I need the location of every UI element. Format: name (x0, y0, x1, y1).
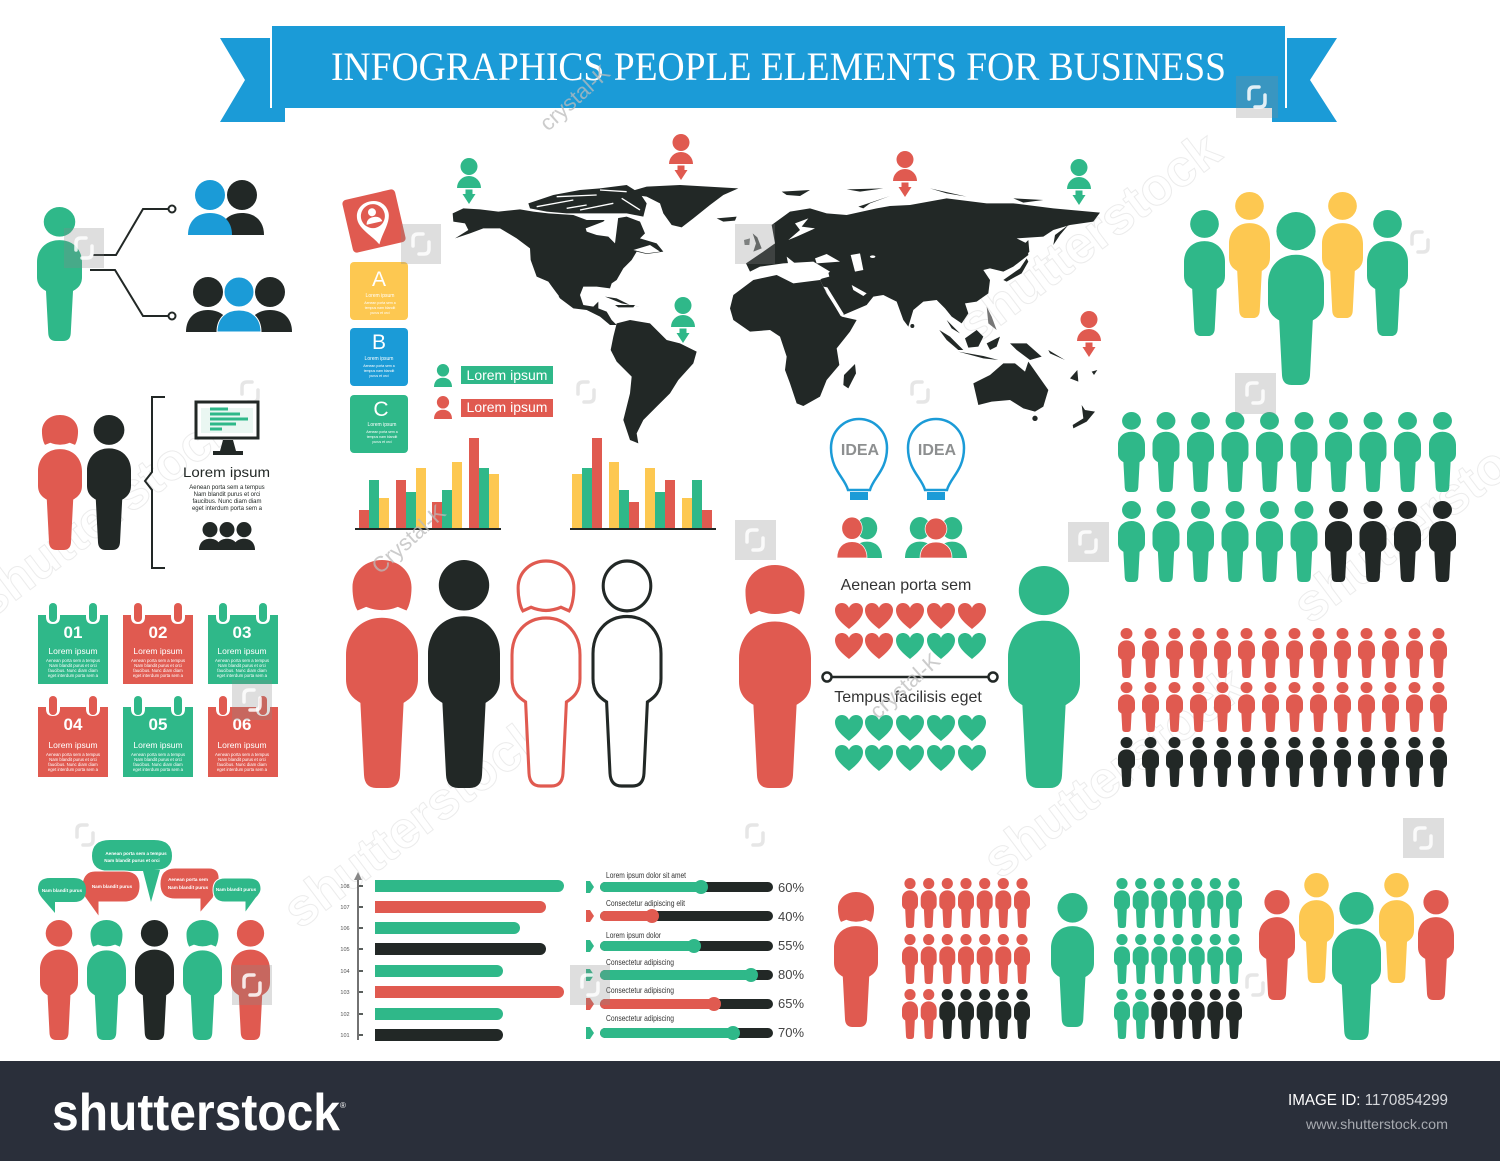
horizontal bar chart: 103 (340, 990, 350, 996)
site url: www.shutterstock.com (1305, 1116, 1448, 1132)
image id: IMAGE ID: 1170854299 (1288, 1092, 1448, 1109)
calendar 06: eget interdum porta sem a (217, 767, 268, 772)
calendar 04 (38, 696, 108, 777)
calendar 02: Nam blandit purus et orci (134, 663, 182, 668)
card C: tempus nam blandit (367, 435, 397, 439)
pin: green South America (671, 297, 695, 343)
slider 70%: 70% (778, 1025, 804, 1040)
calendar 02: 02 (149, 623, 167, 642)
horizontal bar chart: 108 (340, 884, 350, 890)
icon: three people (905, 517, 967, 558)
progress sliders (586, 871, 804, 1040)
icon: monitor with chart (196, 402, 258, 455)
slider 80%: 80% (778, 967, 804, 982)
logo: shutterstock (52, 1084, 340, 1142)
card B: tempus nam blandit (364, 369, 394, 373)
slider 80%: Consectetur adipiscing (606, 958, 674, 967)
calendar 01: Nam blandit purus et orci (49, 663, 97, 668)
calendar 06 (208, 696, 278, 777)
panel: bottom right group (1259, 873, 1454, 1040)
calendar 02: Lorem ipsum (133, 646, 183, 656)
panel: bottom green figure and grid (1051, 878, 1242, 1039)
panel: green people group with yellow (1184, 192, 1408, 385)
calendar 01: Lorem ipsum (48, 646, 98, 656)
card A: Aenean porta sem a (364, 301, 396, 305)
calendar 05: Nam blandit purus et orci (134, 757, 182, 762)
slider 55%: Lorem ipsum dolor (606, 931, 661, 940)
watermark: diagonal text: shutterstock (972, 655, 1257, 890)
calendar 03: Aenean porta sem a tempus (215, 658, 269, 663)
card C: purus et orci (372, 440, 392, 444)
calendar 03: Lorem ipsum (217, 646, 267, 656)
footer bar (0, 1061, 1500, 1161)
card B: purus et orci (369, 374, 389, 378)
calendar 04: eget interdum porta sem a (48, 767, 99, 772)
calendar 02 (123, 603, 193, 684)
calendar 06: faucibus. Nunc diam diam (217, 762, 267, 767)
card A: purus et orci (370, 311, 390, 315)
icon: three black people (199, 522, 255, 550)
bar chart: right (570, 438, 716, 530)
bubble: left red: Nam blandit purus (92, 884, 133, 889)
card B: B (372, 331, 386, 354)
calendar 03: faucibus. Nunc diam diam (217, 668, 267, 673)
panel: red figure, hearts, green figure: Tempus facilisis eget (834, 689, 982, 706)
calendar 04: 04 (64, 715, 83, 734)
slider 55% (586, 931, 804, 953)
panel: red and black pair with bracket: Aenean porta sem a tempus (189, 485, 265, 491)
bubble: left red (82, 871, 140, 917)
map pins (457, 134, 1101, 357)
pin: green Siberia (1067, 159, 1091, 205)
watermark: crystal-k text: Crystal-K (367, 499, 451, 579)
watermark: crystal-k text (367, 60, 945, 724)
map legend: Lorem ipsum (467, 367, 547, 383)
icon: idea bulb left: IDEA (841, 442, 880, 459)
calendar 06: Nam blandit purus et orci (218, 757, 266, 762)
icon: idea bulb right: IDEA (918, 442, 957, 459)
watermark: crystal-k text: crystal-K (865, 648, 945, 724)
slider 60% (586, 871, 804, 895)
slider 40%: Consectetur adipiscing elit (606, 899, 686, 908)
horizontal bar chart: 101 (340, 1033, 350, 1039)
calendar 03: 03 (233, 623, 251, 642)
horizontal bar chart: 104 (340, 969, 350, 975)
panel: pin and A B C cards (342, 189, 408, 453)
world map (453, 185, 1100, 443)
card C: Lorem ipsum (368, 422, 396, 428)
pin: green North America (457, 158, 481, 204)
card B (350, 328, 408, 386)
panel: bottom red figure and grid (834, 878, 1030, 1039)
calendar 02: faucibus. Nunc diam diam (133, 668, 183, 673)
watermark: diagonal text: shutterstock (947, 120, 1232, 355)
horizontal bar chart: 106 (340, 926, 350, 932)
slider 70% (586, 1014, 804, 1040)
card B: Lorem ipsum (365, 356, 393, 362)
card B: Aenean porta sem a (363, 364, 395, 368)
horizontal bar chart: 102 (340, 1012, 350, 1018)
icon: two people (837, 517, 882, 558)
bubble: far left green (38, 878, 86, 913)
panel: four large figures (346, 560, 661, 788)
card A (350, 262, 408, 320)
calendar 06: Aenean porta sem a tempus (215, 752, 269, 757)
footer bar: ® (340, 1101, 346, 1110)
map legend (434, 364, 553, 419)
bubble: right red (160, 868, 219, 913)
card C: Aenean porta sem a (366, 430, 398, 434)
card C: C (373, 398, 389, 421)
panel: red and black pair with bracket: faucibus. Nunc diam diam (192, 499, 262, 505)
title banner (220, 26, 1337, 122)
panel: calendars (38, 603, 278, 777)
watermark: faint swirl marks (77, 232, 1428, 995)
panel: red and black pair with bracket (38, 397, 270, 568)
calendar 04: Nam blandit purus et orci (49, 757, 97, 762)
panel: red and black pair with bracket: eget interdum porta sem a (192, 506, 263, 512)
panel: person to groups diagram (37, 180, 292, 341)
panel: red figure, hearts, green figure: Aenean porta sem (841, 577, 971, 594)
bubble: far right green: Nam blandit purus (216, 887, 257, 892)
icon: location pin badge (342, 189, 406, 253)
slider 40% (586, 899, 804, 924)
watermark: crystal-k text: crystal-K (535, 60, 615, 136)
panel: red figure, hearts, green figure (739, 565, 1080, 788)
panel: people talking with speech bubbles (38, 840, 270, 1040)
calendar 01: 01 (64, 623, 82, 642)
calendar 06: 06 (233, 715, 251, 734)
calendar 05: eget interdum porta sem a (133, 767, 184, 772)
eurasia africa oceania (730, 188, 1100, 428)
card A: Lorem ipsum (366, 293, 394, 299)
bubble: far right green (213, 878, 261, 913)
bubble: right red: Aenean porta sem (168, 877, 208, 882)
slider 40%: 40% (778, 909, 804, 924)
slider 65%: Consectetur adipiscing (606, 986, 674, 995)
watermark: diagonal text: shutterstock (272, 705, 557, 940)
calendar 02: Aenean porta sem a tempus (131, 658, 185, 663)
calendar 01: faucibus. Nunc diam diam (48, 668, 98, 673)
calendar 04: Lorem ipsum (48, 740, 98, 750)
americas (453, 185, 738, 443)
calendar 03 (208, 603, 278, 684)
title: INFOGRAPHICS PEOPLE ELEMENTS FOR BUSINESS (331, 44, 1226, 89)
calendar 02: eget interdum porta sem a (133, 673, 184, 678)
calendar 05: Lorem ipsum (133, 740, 183, 750)
slider 60%: 60% (778, 880, 804, 895)
map legend: Lorem ipsum (467, 399, 547, 415)
slider 65%: 65% (778, 996, 804, 1011)
card A: A (372, 268, 386, 291)
calendar 05: faucibus. Nunc diam diam (133, 762, 183, 767)
panel: red and black pair with bracket: Nam blandit purus et orci (194, 492, 260, 498)
calendar 03: eget interdum porta sem a (217, 673, 268, 678)
calendar 05: Aenean porta sem a tempus (131, 752, 185, 757)
panel: people grid red and black (1118, 628, 1447, 787)
pin: red Russia (893, 151, 917, 197)
slider 80% (586, 958, 804, 982)
slider 70%: Consectetur adipiscing (606, 1014, 674, 1023)
bubble: right red: Nam blandit purus (168, 885, 209, 890)
calendar 04: Aenean porta sem a tempus (46, 752, 100, 757)
calendar 05: 05 (149, 715, 167, 734)
calendar 01 (38, 603, 108, 684)
calendar 05 (123, 696, 193, 777)
card C (350, 395, 408, 453)
card A: tempus nam blandit (365, 306, 395, 310)
hearts rating top (835, 603, 986, 659)
hearts rating bottom (835, 715, 986, 771)
watermark: stamps (64, 76, 1444, 1005)
calendar 01: Aenean porta sem a tempus (46, 658, 100, 663)
calendar 06: Lorem ipsum (217, 740, 267, 750)
pin: red Greenland (669, 134, 693, 180)
calendar 03: Nam blandit purus et orci (218, 663, 266, 668)
calendar 04: faucibus. Nunc diam diam (48, 762, 98, 767)
slider 55%: 55% (778, 938, 804, 953)
bubble: top green: Nam blandit purus et orci (104, 858, 160, 863)
slider 65% (586, 986, 804, 1011)
panel: people grid green and black (1118, 412, 1456, 582)
horizontal bar chart (340, 872, 564, 1041)
bubble: top green: Aenean porta sem a tempus (105, 851, 167, 856)
bubble: far left green: Nam blandit purus (42, 888, 83, 893)
panel: idea bulbs (831, 419, 967, 558)
watermark: diagonal text (0, 120, 1500, 940)
horizontal bar chart: 107 (340, 905, 350, 911)
bar chart: left (355, 438, 501, 530)
bubble: top green (92, 840, 172, 902)
calendar 01: eget interdum porta sem a (48, 673, 99, 678)
pin: red Pacific (1077, 311, 1101, 357)
slider 60%: Lorem ipsum dolor sit amet (606, 871, 687, 880)
panel: red and black pair with bracket: Lorem ipsum (183, 465, 270, 480)
horizontal bar chart: 105 (340, 947, 350, 953)
